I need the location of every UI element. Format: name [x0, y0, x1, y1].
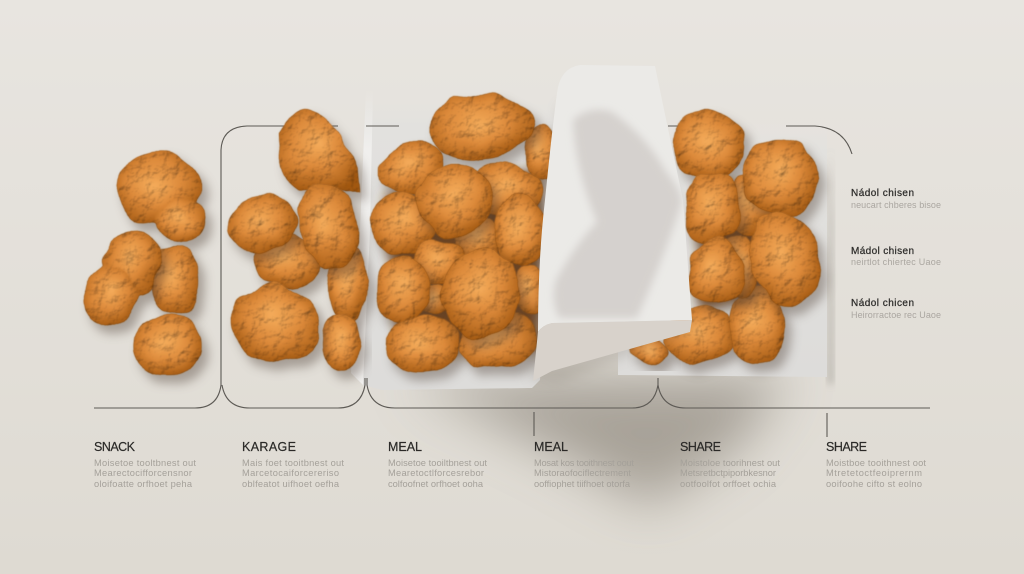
paper shadow: chicken seen through — [554, 110, 682, 318]
caption: karaage: oblfeatot uifhoet oefha — [242, 479, 340, 489]
nugget 2 — [88, 231, 159, 326]
nugget 14 — [527, 124, 557, 180]
caption: share: Metsretbctpiporbkesnor — [680, 468, 776, 478]
nugget 12 — [428, 91, 536, 163]
side note one: Nádol chisen — [851, 188, 914, 199]
nugget 1 — [118, 154, 205, 241]
caption: snack: Mearectocifforcensnor — [94, 468, 192, 478]
nugget 11 — [324, 314, 358, 370]
caption: share: ootfoolfot orffoet ochia — [680, 479, 777, 489]
dark base between share pieces — [700, 180, 770, 310]
nugget 5 — [280, 112, 358, 190]
nugget 18 — [495, 197, 545, 265]
caption: snack — [94, 440, 196, 489]
side note three — [851, 298, 941, 320]
nugget 25 — [456, 308, 540, 372]
nugget 3 — [151, 247, 199, 315]
caption: meal second: Mistoraofociflectrement — [534, 468, 631, 478]
nugget 31 — [689, 240, 743, 304]
side note one: neucart chberes bisoe — [851, 200, 941, 210]
caption: meal: colfoofnet orfhoet ooha — [388, 479, 484, 489]
caption: meal: Mearetoctlforcesrebor — [388, 468, 484, 478]
nugget 27 — [745, 139, 817, 215]
caption: karaage: Marcetocaiforcereriso — [242, 468, 339, 478]
nugget 35 — [633, 340, 667, 362]
nugget 13 — [375, 135, 449, 199]
caption: share: SHARE — [680, 440, 721, 454]
caption: snack: Moisetoe tooltbnest out — [94, 458, 196, 468]
nuggets: snack group — [88, 154, 205, 374]
nugget 34 — [665, 308, 733, 362]
caption: snack: oloifoatte orfhoet peha — [94, 479, 193, 489]
nugget 32 — [725, 235, 759, 295]
caption: meal: MEAL — [388, 440, 422, 454]
panel: translucent curled paper — [530, 65, 695, 382]
nugget 4 — [134, 318, 200, 374]
caption: share second: Moistboe tooithnest oot — [826, 458, 926, 468]
caption: meal — [388, 440, 487, 489]
side note two: neirtlot chiertec Uaoe — [851, 257, 941, 267]
nugget 7 — [292, 179, 364, 273]
caption: share — [680, 440, 780, 489]
nugget 33 — [730, 288, 784, 362]
caption: karaage: KARAGE — [242, 440, 296, 454]
cast shadow below paper — [405, 375, 790, 505]
nugget 28 — [685, 173, 739, 243]
panel: centre paper liner — [351, 90, 556, 390]
nugget 23 — [515, 266, 545, 314]
nugget 15 — [419, 165, 491, 235]
nugget 9 — [330, 250, 366, 320]
bracket lines — [94, 126, 930, 437]
caption: share: Moistoloe toorihnest out — [680, 458, 780, 468]
caption: share second — [826, 440, 926, 489]
nuggets: karaage group — [221, 112, 366, 372]
nugget 26 — [420, 284, 448, 316]
dark base between meal pieces — [385, 170, 540, 355]
caption: meal: Moisetoe tooiltbnest out — [388, 458, 487, 468]
side note three: Heirorractoe rec Uaoe — [851, 310, 941, 320]
nugget 6 — [225, 191, 301, 255]
nugget 20 — [456, 218, 500, 262]
panel: right paper liner — [618, 122, 834, 384]
nuggets: meal group — [374, 91, 557, 372]
nugget 24 — [386, 319, 458, 371]
nugget 22 — [430, 241, 530, 347]
nugget 26 — [673, 112, 745, 178]
side note one — [851, 188, 941, 210]
curl sheet — [538, 65, 692, 332]
side note three: Nádol chicen — [851, 298, 914, 309]
caption: share second: Mtretetoctfeoiprernm — [826, 468, 922, 478]
nugget 8 — [255, 236, 321, 288]
caption: snack: SNACK — [94, 440, 136, 454]
caption: meal second — [534, 440, 634, 489]
nugget 17 — [374, 193, 436, 253]
side note two: Mádol chisen — [851, 246, 914, 257]
nugget 19 — [415, 240, 463, 282]
fold strip — [533, 320, 692, 381]
nugget 10 — [221, 274, 329, 372]
nugget 16 — [464, 156, 546, 224]
caption: karaage: Mais foet tooitbnest out — [242, 458, 344, 468]
side note two — [851, 246, 941, 267]
nugget 29 — [727, 177, 773, 233]
caption: share second: SHARE — [826, 440, 867, 454]
caption: share second: ooifoohe cifto st eolno — [826, 479, 922, 489]
nuggets: share group — [633, 112, 827, 362]
nugget 21 — [377, 257, 429, 323]
caption: meal second: MEAL — [534, 440, 568, 454]
caption: meal second: Mosat kos tooithnest oout — [534, 458, 634, 468]
caption: meal second: ooffiophet tiifhoet otorfa — [534, 479, 631, 489]
caption: karaage — [242, 440, 344, 489]
nugget 30 — [743, 207, 827, 311]
